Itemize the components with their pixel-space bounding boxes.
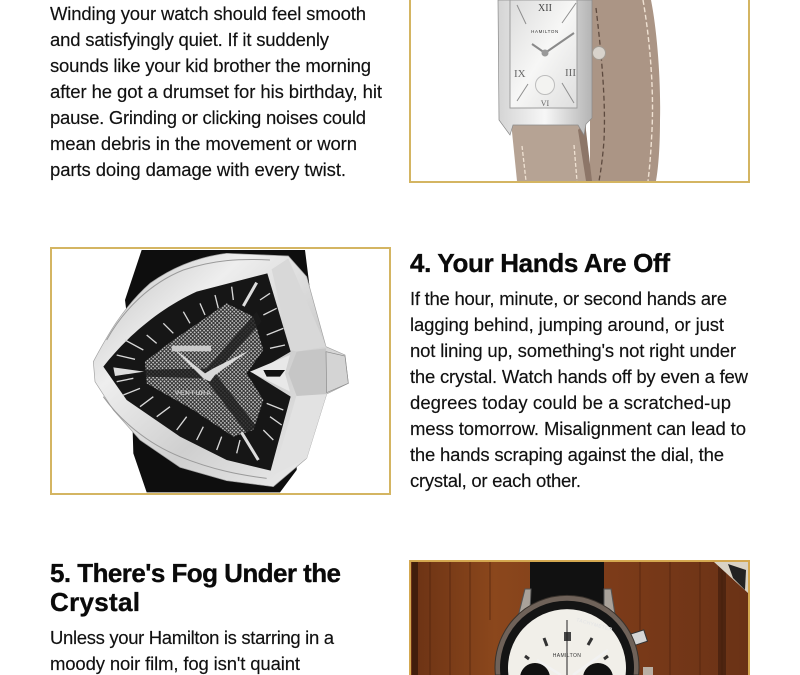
icon: black dial with dotted centre and hands: VENTURA [175, 390, 212, 397]
text block: winding noise paragraph [50, 3, 382, 180]
text block: hands misaligned paragraph: mess tomorrow. Misalignment can lead to [410, 418, 746, 439]
text block: hands misaligned paragraph [410, 288, 749, 491]
icon: black dial with dotted centre and hands [103, 273, 291, 471]
text block: winding noise paragraph: pause. Grinding or clicking noises could [50, 107, 366, 128]
text block: hands misaligned paragraph: crystal, or each other. [410, 470, 581, 491]
text block: winding noise paragraph: mean debris in the movement or worn [50, 133, 357, 154]
icon: corner cloth [714, 562, 748, 593]
icon: black leather strap [530, 562, 604, 608]
text block: hands misaligned paragraph: degrees today could be a scratched-up [410, 392, 731, 413]
text block: hands misaligned paragraph: the crystal. Watch hands off by even a few [410, 366, 749, 387]
heading: 5. There's Fog Under the Crystal: 5. There's Fog Under the [50, 558, 341, 588]
icon: silver dial with roman numerals: IX [514, 68, 526, 80]
icon: silver dial with roman numerals: VI [541, 99, 550, 108]
text block: fog paragraph: moody noir film, fog isn't quaint [50, 653, 300, 674]
icon: silver dial with roman numerals [510, 0, 577, 108]
text block: hands misaligned paragraph: the hands scraping against the dial, the [410, 444, 724, 465]
text block: fog paragraph: Unless your Hamilton is starring in a [50, 627, 335, 648]
frame [410, 561, 749, 675]
icon: triangular steel case [93, 253, 348, 487]
text block: winding noise paragraph: parts doing damage with every twist. [50, 159, 346, 180]
icon: steel lugs and pushers [517, 589, 653, 675]
icon: chronograph dial: HAMILTON [553, 653, 581, 659]
icon: black rubber strap [125, 250, 310, 492]
text block: hands misaligned paragraph: not lining up, something's not right under [410, 340, 736, 361]
icon: chronograph dial: TACHYMETER [575, 617, 613, 633]
text block: winding noise paragraph: sounds like your kid brother the morning [50, 55, 371, 76]
text block: winding noise paragraph: after he got a drumset for his birthday, hit [50, 81, 382, 102]
heading: 4. Your Hands Are Off: 4. Your Hands Are Off [410, 248, 670, 278]
frame [410, 0, 749, 182]
text block: winding noise paragraph: and satisfyingly quiet. If it suddenly [50, 29, 330, 50]
text block: hands misaligned paragraph: If the hour, minute, or second hands are [410, 288, 727, 309]
panel: Hamilton Ardmore rectangular watch photo [410, 0, 749, 182]
text block: hands misaligned paragraph: lagging behind, jumping around, or just [410, 314, 724, 335]
icon: chronograph dial [495, 595, 639, 675]
icon: silver dial with roman numerals: III [565, 67, 576, 79]
text block: winding noise paragraph: Winding your watch should feel smooth [50, 3, 366, 24]
wood grain [430, 562, 722, 675]
panel: Hamilton Ventura triangular watch photo [51, 248, 390, 494]
heading: 5. There's Fog Under the Crystal: Crystal [50, 587, 140, 617]
icon: wrapped taupe leather strap [511, 0, 660, 181]
heading: 5. There's Fog Under the Crystal [50, 558, 341, 617]
icon: steel rectangular case [498, 0, 606, 135]
icon: silver dial with roman numerals: XII [538, 3, 552, 14]
panel: chronograph watch on wood photo [410, 561, 749, 675]
text block: fog paragraph [50, 627, 335, 674]
icon: silver dial with roman numerals: HAMILTON [531, 29, 559, 34]
